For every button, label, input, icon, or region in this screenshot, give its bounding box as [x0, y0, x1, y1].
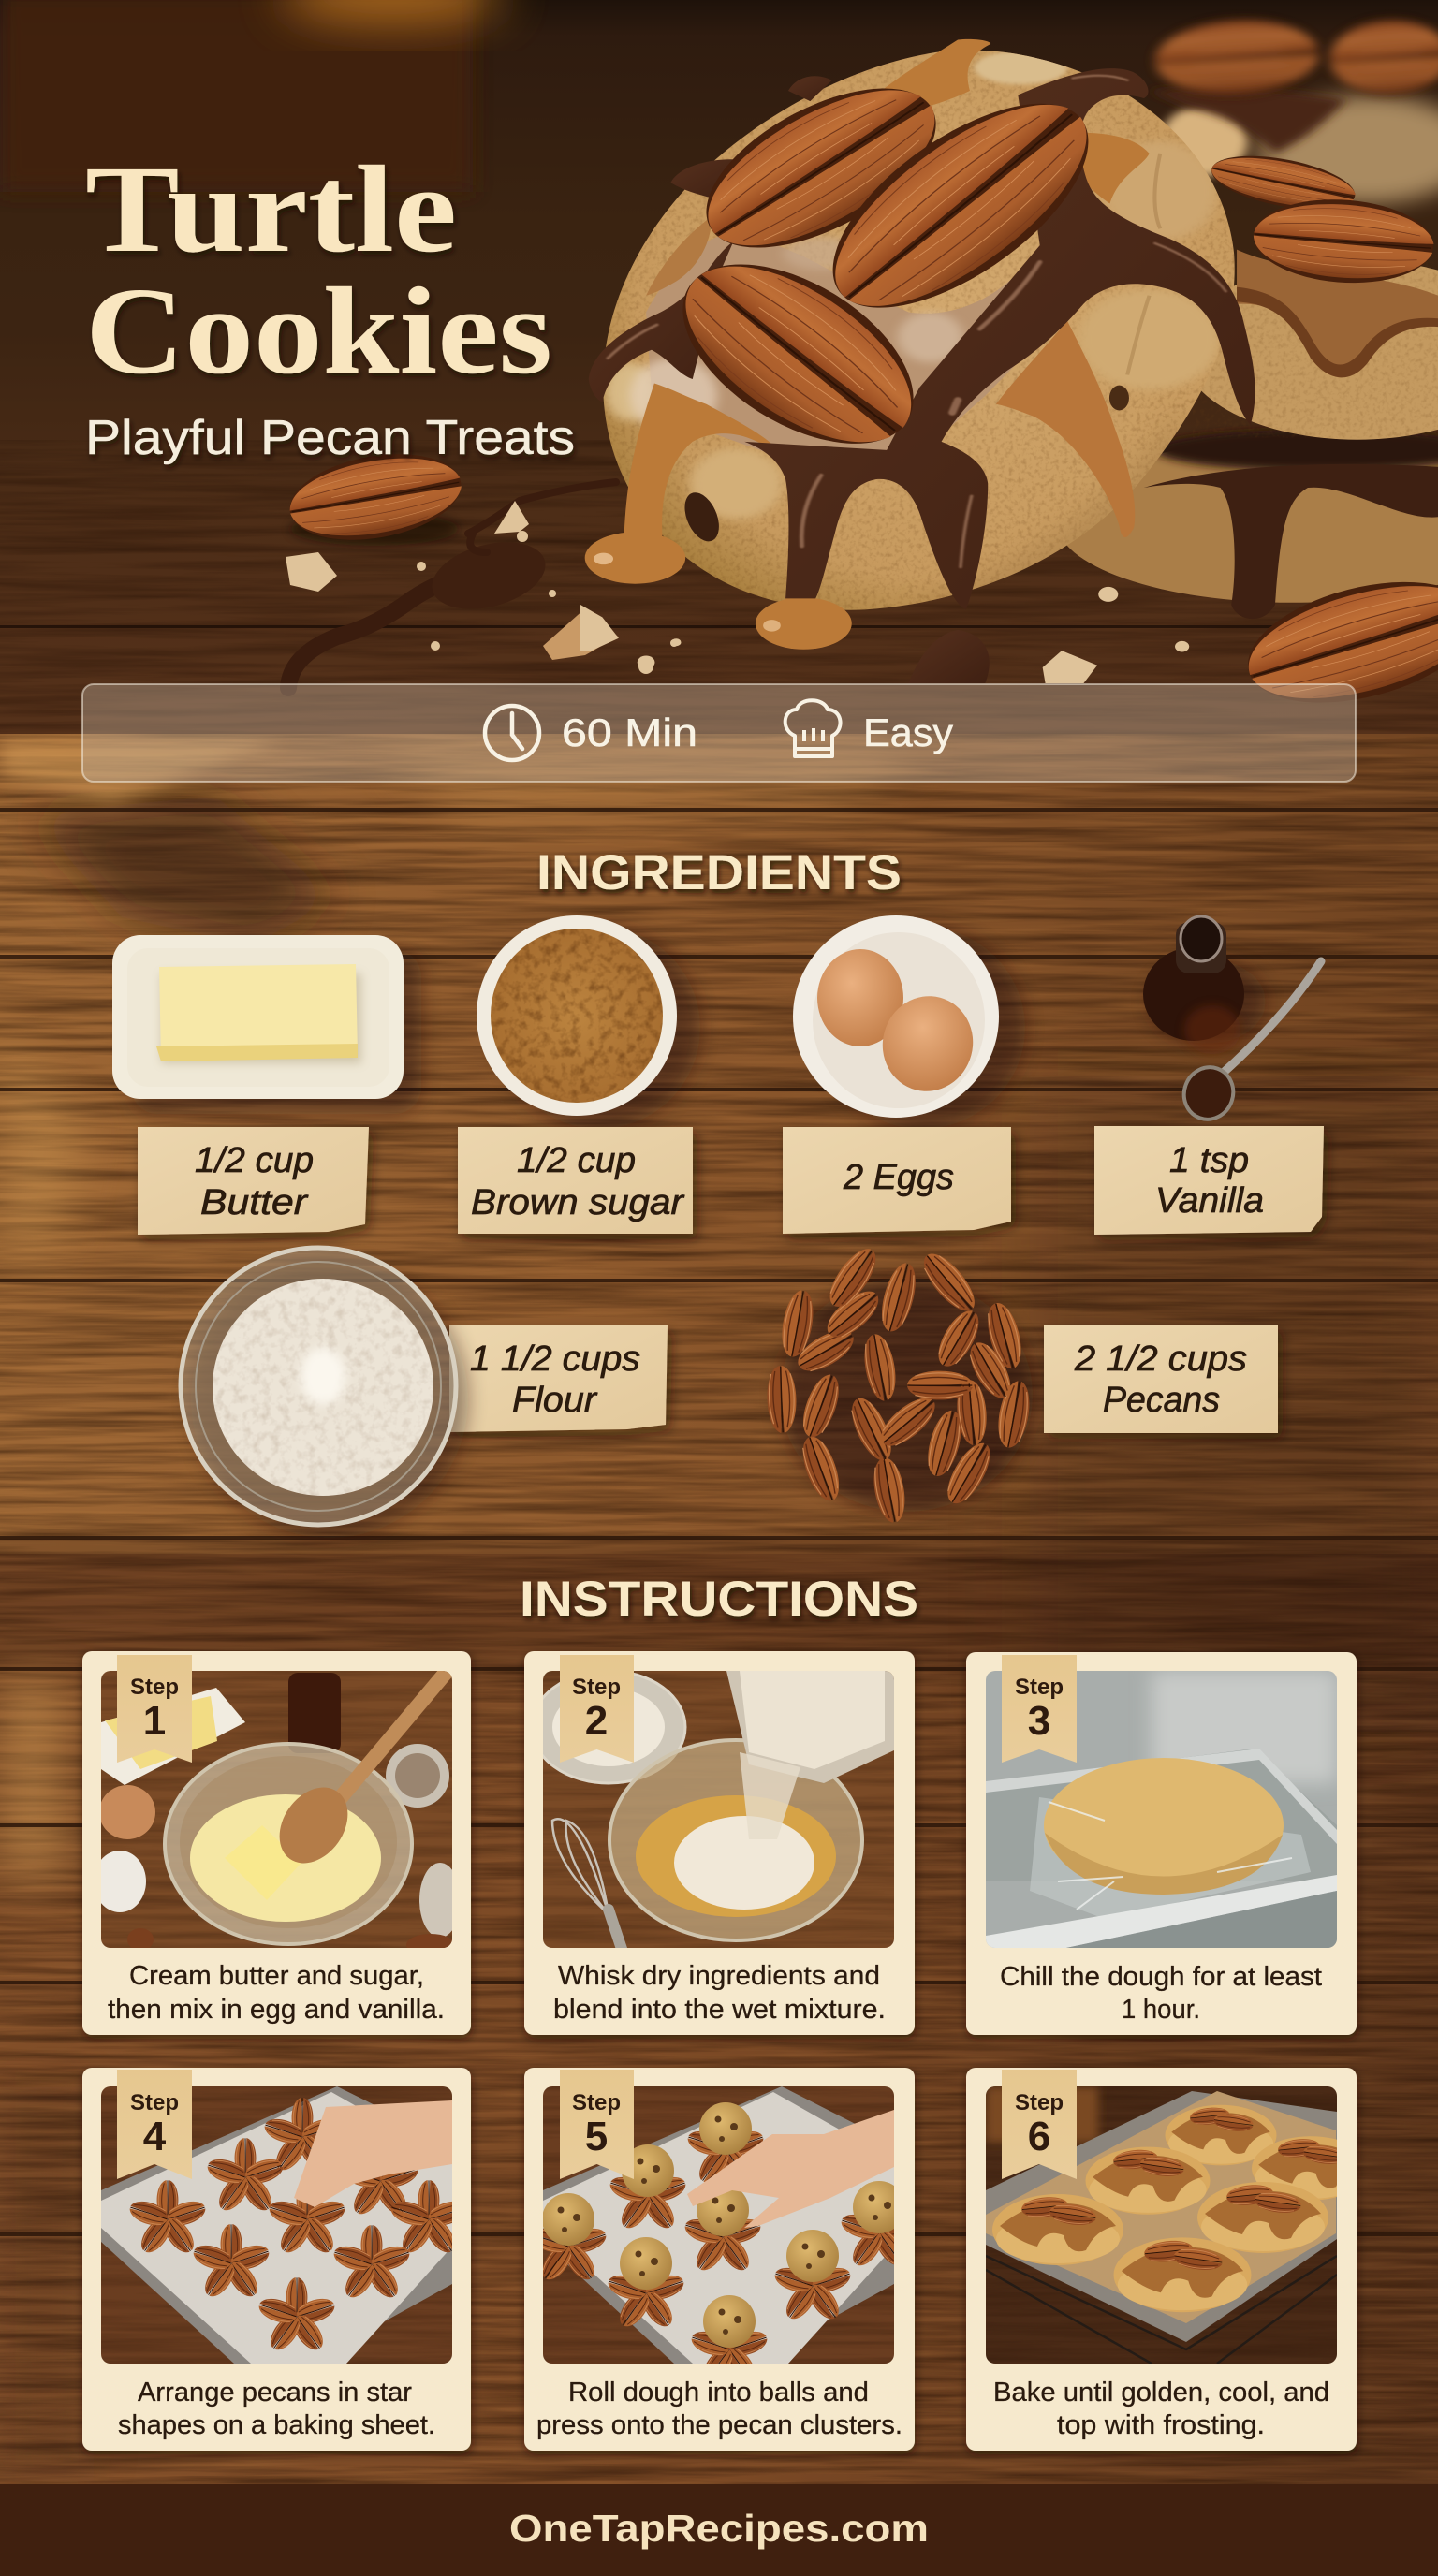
icon: clock [485, 706, 539, 760]
crumbs right [580, 587, 1189, 683]
heading: instructions: INSTRUCTIONS [520, 1572, 918, 1627]
difficulty label: Easy [863, 710, 953, 754]
note: butter [138, 1127, 369, 1235]
pecans on cookie [683, 88, 1088, 444]
ribbon: step 6: Step [1015, 2090, 1064, 2115]
chocolate swirl on table [288, 482, 616, 688]
cookie stack traced [580, 13, 1438, 726]
caption: step 2: Whisk dry ingredients and [558, 1961, 880, 1991]
ingredient: flour bowl [181, 1248, 468, 1538]
ribbon: step 1 [117, 1655, 192, 1763]
chocolate highlights [608, 76, 1225, 567]
card: step 4 [82, 2068, 471, 2451]
heading: ingredients: INGREDIENTS [536, 845, 902, 900]
time label: 60 Min [562, 710, 697, 754]
chocolate drizzle [589, 68, 1255, 683]
ingredient: eggs [793, 915, 1025, 1129]
ribbon: step 2: 2 [585, 1698, 608, 1744]
ingredient: pecan pile [766, 1242, 1034, 1525]
caption: step 5: Roll dough into balls and [568, 2378, 869, 2408]
ribbon: step 5: 5 [585, 2114, 608, 2159]
card: step 5 [524, 2068, 919, 2451]
note: flour: Flour [512, 1381, 597, 1420]
note: butter: 1/2 cup [195, 1141, 314, 1180]
ribbon: step 1: Step [130, 1675, 179, 1700]
ingredient: brown sugar [477, 915, 700, 1129]
caption: step 2: blend into the wet mixture. [553, 1995, 886, 2025]
photo: dough in fridge [986, 1671, 1337, 1952]
caramel streams [585, 39, 1150, 650]
caption: step 6: top with frosting. [1057, 2410, 1265, 2440]
note: butter: Butter [200, 1183, 309, 1222]
subtitle: Playful Pecan Treats [85, 411, 575, 465]
note: brown sugar [458, 1127, 693, 1234]
table pecan left [288, 455, 462, 550]
caption: step 2 [553, 1961, 886, 2025]
photo: pecan stars on tray [101, 2086, 469, 2364]
caption: step 4: shapes on a baking sheet. [118, 2410, 435, 2440]
card: step 2 [524, 1651, 915, 2035]
photo: creaming butter [94, 1671, 461, 1956]
ribbon: step 2: Step [572, 1675, 621, 1700]
caption: step 4 [118, 2378, 435, 2440]
photo: baked cookies [986, 2086, 1370, 2364]
caption: step 5 [536, 2378, 902, 2440]
caption: step 3: 1 hour. [1122, 1995, 1200, 2025]
crumbs [286, 501, 678, 674]
caption: step 1: Cream butter and sugar, [129, 1961, 424, 1991]
main cookie body [603, 51, 1235, 610]
ingredient: butter [112, 935, 421, 1114]
ribbon: step 2 [560, 1655, 634, 1763]
wood background [0, 734, 1438, 2490]
ribbon: step 4: 4 [143, 2114, 167, 2159]
title: Cookies [85, 261, 552, 400]
glass info bar [82, 684, 1356, 782]
caption: step 1 [108, 1961, 445, 2025]
ribbon: step 1: 1 [143, 1698, 166, 1744]
ribbon: step 5: Step [572, 2090, 621, 2115]
footer: OneTapRecipes.com [509, 2507, 929, 2550]
note: pecans: Pecans [1103, 1381, 1220, 1420]
ribbon: step 3: Step [1015, 1675, 1064, 1700]
caption: step 4: Arrange pecans in star [138, 2378, 412, 2408]
caption: step 6 [993, 2378, 1329, 2440]
footer [0, 2484, 1438, 2576]
card: step 1 [82, 1651, 471, 2035]
note: vanilla [1094, 1126, 1324, 1235]
caption: step 5: press onto the pecan clusters. [536, 2410, 902, 2440]
card: step 3 [966, 1652, 1357, 2035]
note: vanilla: 1 tsp [1169, 1141, 1249, 1180]
caramel sheen pool [646, 237, 1014, 451]
caption: step 1: then mix in egg and vanilla. [108, 1995, 445, 2025]
ribbon: step 3 [1002, 1655, 1077, 1763]
note: eggs [783, 1127, 1011, 1234]
ribbon: step 3: 3 [1028, 1698, 1050, 1744]
title [85, 139, 552, 400]
back cookies [1056, 13, 1438, 726]
photo: dough balls on pecans [528, 2086, 919, 2388]
note: flour: 1 1/2 cups [470, 1339, 640, 1379]
ribbon: step 4: Step [130, 2090, 179, 2115]
note: eggs: 2 Eggs [843, 1158, 954, 1197]
note: pecans [1044, 1325, 1278, 1433]
hero photo: cookies [0, 0, 1438, 734]
caption: step 3: Chill the dough for at least [1000, 1962, 1322, 1992]
icon: chef hat [785, 700, 841, 756]
note: flour [449, 1325, 668, 1432]
ribbon: step 6: 6 [1028, 2114, 1050, 2159]
card: step 6 [966, 2068, 1370, 2451]
note: brown sugar: 1/2 cup [517, 1141, 636, 1180]
ingredient: vanilla [1143, 916, 1321, 1126]
caption: step 3 [1000, 1962, 1322, 2025]
ribbon: step 5 [560, 2070, 634, 2179]
ribbon: step 6 [1002, 2070, 1077, 2179]
title: Turtle [85, 139, 457, 278]
photo: whisking flour [532, 1671, 894, 1952]
ribbon: step 4 [117, 2070, 192, 2179]
note: vanilla: Vanilla [1155, 1181, 1264, 1221]
note: brown sugar: Brown sugar [471, 1183, 684, 1222]
caption: step 6: Bake until golden, cool, and [993, 2378, 1329, 2408]
note: pecans: 2 1/2 cups [1074, 1339, 1247, 1379]
